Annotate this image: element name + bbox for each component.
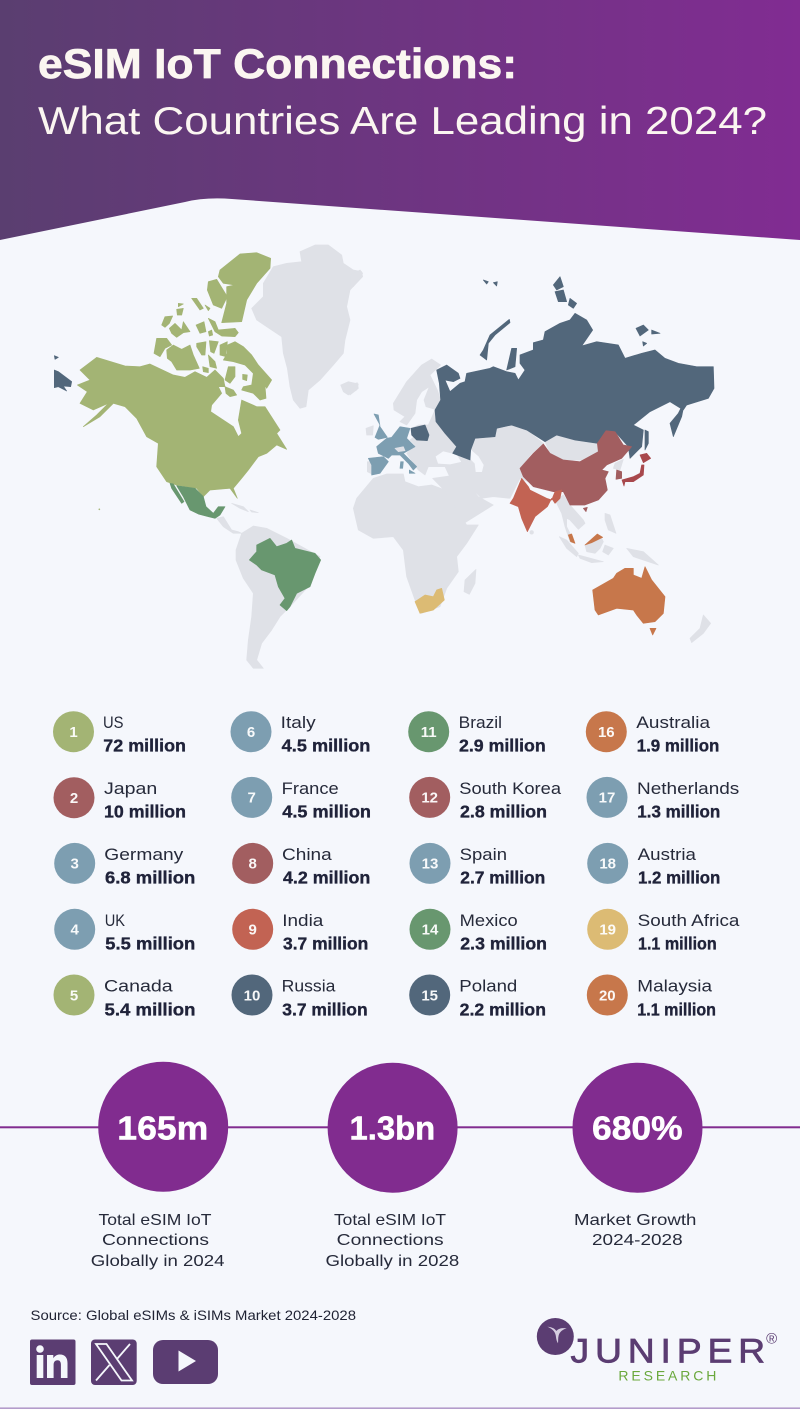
item 19 South Africa: South Africa xyxy=(638,911,740,930)
item 2 Japan: 2 xyxy=(70,790,78,807)
item 7 France: France xyxy=(282,779,339,798)
item 15 Poland: Poland xyxy=(459,977,517,996)
item 1 US: 72 million xyxy=(103,736,186,756)
item 11 Brazil: 11 xyxy=(421,724,437,741)
logo mark xyxy=(537,1318,574,1355)
map: Australia xyxy=(593,567,665,635)
item 14 Mexico: 14 xyxy=(422,922,439,939)
ranking list xyxy=(53,711,740,1019)
item 5 Canada: 5 xyxy=(70,987,78,1004)
icon: X xyxy=(91,1340,137,1385)
item 5 Canada xyxy=(54,974,196,1019)
item 6 Italy: Italy xyxy=(281,713,316,732)
item 1 US xyxy=(53,711,186,756)
map: Black Sea and Caspian Sea xyxy=(436,450,483,472)
item 9 India: 3.7 million xyxy=(283,934,368,954)
icon: LinkedIn xyxy=(30,1340,76,1385)
map: Japan xyxy=(622,453,651,486)
map: Malaysia xyxy=(568,534,603,545)
map: Russia xyxy=(435,277,714,460)
item 8 China: China xyxy=(282,845,332,864)
item 20 Malaysia: Malaysia xyxy=(637,977,713,996)
item 4 UK: 5.5 million xyxy=(105,934,195,954)
item 4 UK xyxy=(54,909,195,954)
stat: 1.3bn: Total eSIM IoT xyxy=(334,1212,446,1229)
icon: YouTube xyxy=(153,1340,218,1384)
map: Brazil xyxy=(249,538,321,611)
item 14 Mexico xyxy=(410,909,547,954)
item 5 Canada: 5.4 million xyxy=(104,999,196,1019)
stat: 680% xyxy=(572,1063,702,1249)
map: Western Europe xyxy=(368,414,417,475)
item 14 Mexico: 2.3 million xyxy=(460,934,547,954)
item 12 South Korea xyxy=(409,777,562,822)
map: South and Central America xyxy=(217,503,320,668)
map: Americas xyxy=(54,245,363,668)
world map xyxy=(54,245,714,668)
stat: 680%: Market Growth xyxy=(574,1212,696,1229)
map: South Africa xyxy=(415,588,444,613)
stat: 1.3bn: 1.3bn xyxy=(350,1109,435,1146)
logo: Juniper Research: RESEARCH xyxy=(618,1368,716,1384)
item 15 Poland: 2.2 million xyxy=(460,999,546,1019)
stat: 1.3bn xyxy=(326,1063,459,1270)
item 1 US: US xyxy=(103,713,124,732)
item 2 Japan: Japan xyxy=(104,779,157,798)
item 18 Austria: 1.2 million xyxy=(638,868,720,888)
map: Switzerland xyxy=(395,447,405,452)
item 17 Netherlands xyxy=(586,777,739,822)
item 10 Russia xyxy=(232,974,368,1019)
item 3 Germany: 6.8 million xyxy=(105,868,195,888)
map: India xyxy=(510,478,562,532)
item 2 Japan xyxy=(54,777,186,822)
item 15 Poland: 15 xyxy=(421,987,438,1004)
item 11 Brazil xyxy=(408,711,546,756)
map: Greenland and Iceland xyxy=(252,245,363,408)
item 14 Mexico: Mexico xyxy=(460,911,518,930)
title xyxy=(38,40,767,143)
item 18 Austria xyxy=(587,843,720,888)
logo: Juniper Research: JUNIPER xyxy=(570,1332,765,1370)
logo: Juniper Research xyxy=(537,1318,777,1384)
item 19 South Africa: 19 xyxy=(599,922,616,939)
item 18 Austria: Austria xyxy=(638,845,697,864)
item 17 Netherlands: Netherlands xyxy=(637,779,739,798)
item 9 India: India xyxy=(282,911,324,930)
item 13 Spain: Spain xyxy=(460,845,507,864)
item 11 Brazil: Brazil xyxy=(459,713,502,732)
map: Russia far east tip xyxy=(54,356,72,391)
item 10 Russia: 3.7 million xyxy=(282,999,368,1019)
stat: 165m xyxy=(91,1062,228,1270)
item 3 Germany xyxy=(54,843,195,888)
item 12 South Korea: 2.8 million xyxy=(460,802,547,822)
item 15 Poland xyxy=(409,974,546,1019)
title: eSIM IoT Connections: xyxy=(38,40,517,87)
item 20 Malaysia: 20 xyxy=(599,987,616,1004)
source note: Source: Global eSIMs & iSIMs Market 2024-2028 xyxy=(30,1307,356,1323)
map: Mexico xyxy=(170,483,225,518)
logo: Juniper Research: ® xyxy=(766,1330,777,1348)
stat: 165m: Globally in 2024 xyxy=(91,1253,225,1270)
item 8 China: 4.2 million xyxy=(283,868,370,888)
item 17 Netherlands: 1.3 million xyxy=(637,802,720,822)
item 3 Germany: Germany xyxy=(104,845,184,864)
map: Poland xyxy=(411,425,429,441)
item 10 Russia: Russia xyxy=(282,977,336,996)
item 6 Italy xyxy=(230,711,370,756)
stat: 680%: 680% xyxy=(592,1109,683,1146)
item 16 Australia: 1.9 million xyxy=(637,736,719,756)
item 12 South Korea: South Korea xyxy=(459,779,562,798)
map: Eurasia, Africa and Oceania xyxy=(350,270,714,643)
item 3 Germany: 3 xyxy=(71,856,79,873)
title: What Countries Are Leading in 2024? xyxy=(38,100,767,143)
stat: 1.3bn: Globally in 2028 xyxy=(326,1253,459,1270)
item 20 Malaysia xyxy=(587,974,716,1019)
item 7 France: 4.5 million xyxy=(282,802,371,822)
item 7 France xyxy=(231,777,371,822)
item 5 Canada: Canada xyxy=(104,977,173,996)
stat: 165m: 165m xyxy=(117,1109,208,1146)
item 4 UK: UK xyxy=(105,911,126,930)
item 6 Italy: 4.5 million xyxy=(282,736,370,756)
item 13 Spain xyxy=(410,843,545,888)
item 1 US: 1 xyxy=(69,724,78,741)
map: US and Canada xyxy=(77,253,287,510)
item 17 Netherlands: 17 xyxy=(599,790,615,807)
item 20 Malaysia: 1.1 million xyxy=(637,999,716,1019)
stat: 680%: 2024-2028 xyxy=(592,1232,683,1249)
item 10 Russia: 10 xyxy=(244,987,260,1004)
item 9 India xyxy=(232,909,368,954)
item 16 Australia: Australia xyxy=(636,713,711,732)
map: unhighlighted countries xyxy=(350,270,711,643)
header band xyxy=(0,0,800,240)
item 19 South Africa: 1.1 million xyxy=(638,934,717,954)
map: China and South Korea xyxy=(520,431,632,512)
item 13 Spain: 2.7 million xyxy=(460,868,545,888)
item 11 Brazil: 2.9 million xyxy=(459,736,546,756)
item 13 Spain: 13 xyxy=(422,856,438,873)
stat: 165m: Total eSIM IoT xyxy=(98,1212,212,1229)
item 2 Japan: 10 million xyxy=(104,802,186,822)
item 19 South Africa xyxy=(587,909,740,954)
item 9 India: 9 xyxy=(249,922,257,939)
item 6 Italy: 6 xyxy=(247,724,255,741)
item 18 Austria: 18 xyxy=(599,856,616,873)
item 7 France: 7 xyxy=(248,790,256,807)
item 16 Australia xyxy=(586,711,719,756)
stat: 1.3bn: Connections xyxy=(337,1232,444,1249)
item 4 UK: 4 xyxy=(71,922,80,939)
stat: 165m: Connections xyxy=(102,1232,209,1249)
item 16 Australia: 16 xyxy=(598,724,615,741)
item 8 China: 8 xyxy=(249,856,257,873)
item 12 South Korea: 12 xyxy=(421,790,438,807)
item 8 China xyxy=(232,843,370,888)
